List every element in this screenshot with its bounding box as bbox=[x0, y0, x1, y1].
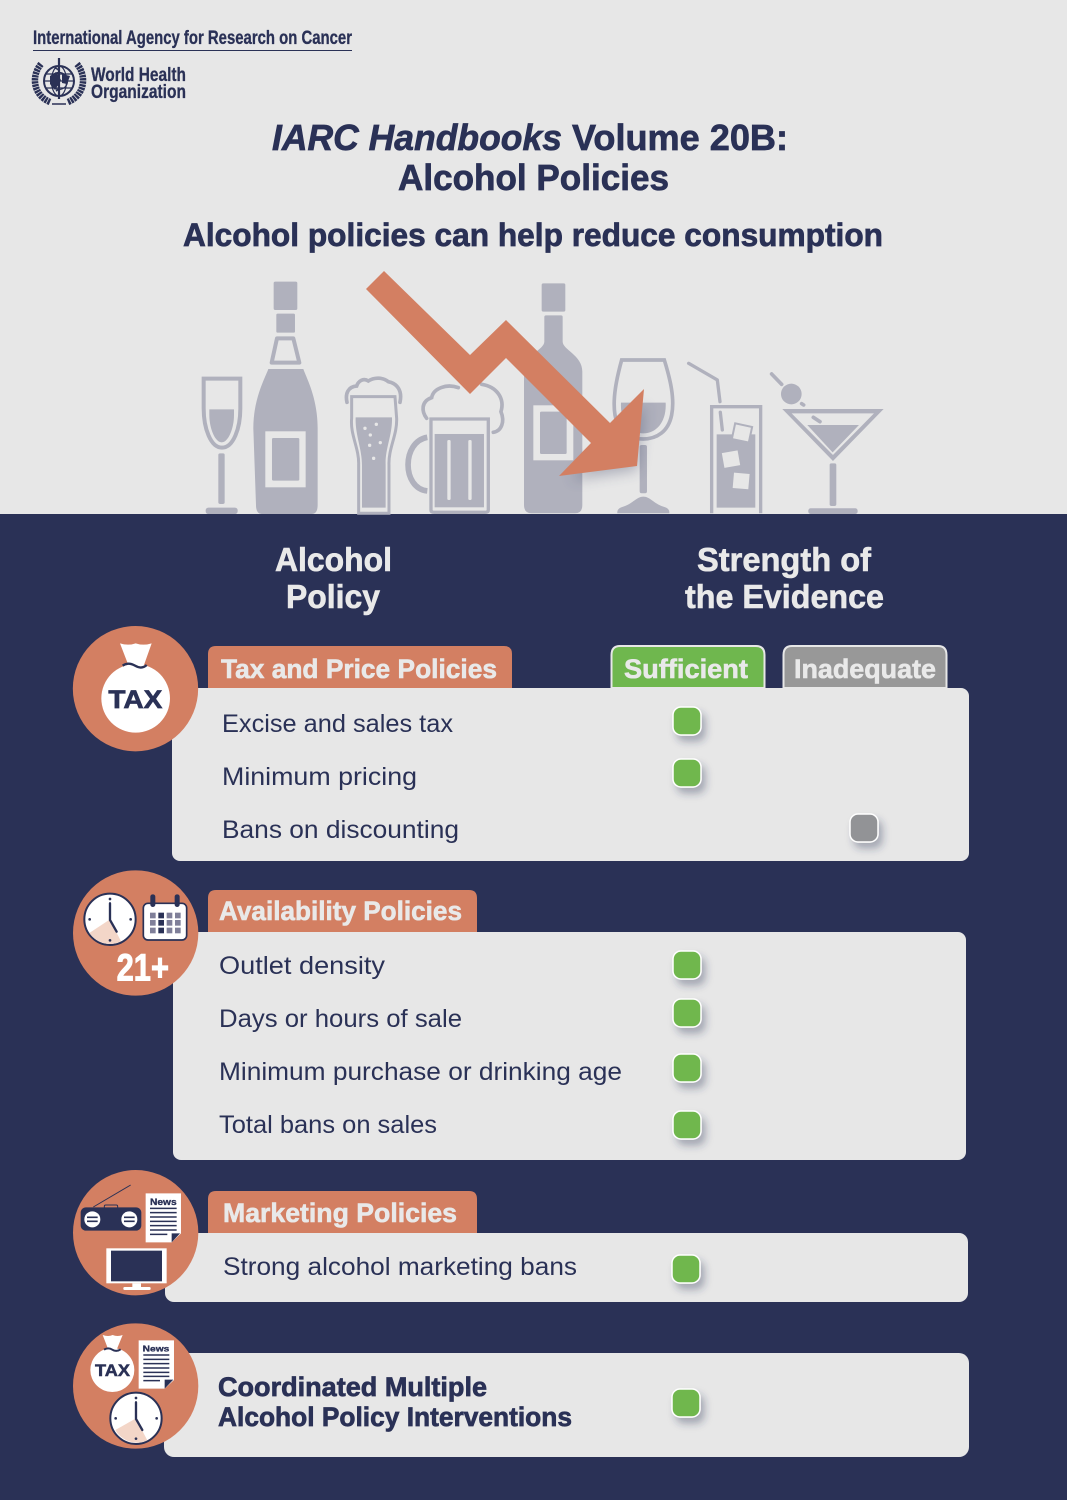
table body bbox=[165, 1233, 968, 1302]
icon: tax, newspaper and clock bbox=[73, 1323, 198, 1449]
icon: beer mug bbox=[408, 384, 503, 512]
marker: sufficient bbox=[673, 759, 701, 787]
WHO logo bbox=[35, 58, 186, 104]
row: coordinated multiple alcohol policy interventions bbox=[218, 1372, 572, 1432]
marker: inadequate bbox=[850, 814, 878, 842]
title: Volume 20B: bbox=[572, 117, 788, 158]
WHO name: World Health bbox=[91, 65, 186, 86]
marker: sufficient bbox=[673, 1054, 701, 1082]
tab: marketing policies bbox=[208, 1191, 477, 1233]
heading: Alcohol Policy: Alcohol bbox=[275, 541, 392, 578]
panel: coordinated multiple interventions bbox=[164, 1353, 969, 1457]
icon: wine bottle bbox=[524, 283, 582, 513]
title bbox=[272, 117, 788, 198]
row: minimum pricing: Minimum pricing bbox=[222, 763, 417, 791]
icon: radio, newspaper and TV: News bbox=[150, 1197, 177, 1207]
icon: tax bag: TAX bbox=[108, 686, 162, 714]
marker: sufficient bbox=[672, 1255, 700, 1283]
heading: Alcohol Policy bbox=[275, 541, 392, 615]
background: light header bbox=[0, 0, 1067, 514]
drinks illustration bbox=[204, 282, 884, 514]
icon: tax, newspaper and clock: TAX bbox=[95, 1361, 130, 1380]
panel: tax and price policies bbox=[172, 646, 969, 861]
marker: sufficient bbox=[673, 707, 701, 735]
icon: WHO emblem bbox=[35, 58, 83, 104]
icon: beer glass bbox=[346, 378, 401, 513]
tab: tax and price policies bbox=[208, 646, 512, 688]
tab: sufficient bbox=[612, 646, 764, 688]
tab: marketing policies: Marketing Policies bbox=[223, 1198, 457, 1228]
tab: tax and price policies: Tax and Price Policies bbox=[221, 654, 497, 684]
subtitle: Alcohol policies can help reduce consumption bbox=[183, 217, 883, 253]
icon: tall glass with ice bbox=[689, 363, 761, 513]
row: total bans on sales: Total bans on sales bbox=[219, 1111, 437, 1139]
icon: radio, newspaper and TV bbox=[73, 1170, 198, 1295]
heading: Alcohol Policy: Policy bbox=[286, 578, 381, 615]
icon: wine glass bbox=[614, 360, 673, 513]
title: IARC Handbooks bbox=[272, 117, 562, 158]
row: days or hours of sale: Days or hours of sale bbox=[219, 1005, 462, 1033]
row: bans on discounting: Bans on discounting bbox=[222, 816, 459, 844]
marker: sufficient bbox=[673, 1111, 701, 1139]
marker: sufficient bbox=[673, 951, 701, 979]
row: coordinated multiple alcohol policy interventions: Coordinated Multiple bbox=[218, 1372, 487, 1402]
marker: sufficient bbox=[672, 1389, 700, 1417]
tab: availability policies: Availability Policies bbox=[219, 896, 462, 926]
table body bbox=[164, 1353, 969, 1457]
icon: champagne flute bbox=[204, 379, 240, 514]
heading: Strength of the Evidence bbox=[685, 541, 884, 615]
tab: inadequate: Inadequate bbox=[794, 654, 936, 684]
row: outlet density: Outlet density bbox=[219, 952, 386, 980]
icon: martini glass bbox=[772, 374, 884, 514]
row: minimum purchase or drinking age: Minimum purchase or drinking age bbox=[219, 1058, 622, 1086]
tab: inadequate bbox=[784, 646, 946, 688]
heading: Strength of the Evidence: the Evidence bbox=[685, 578, 884, 615]
table body bbox=[172, 688, 969, 861]
icon: tax bag bbox=[73, 626, 198, 751]
background: navy panel bbox=[0, 514, 1067, 1500]
icon: clock, calendar and 21+: 21+ bbox=[117, 948, 169, 990]
arrow: downward trend bbox=[366, 271, 645, 480]
row: excise and sales tax: Excise and sales tax bbox=[222, 710, 453, 738]
icon: tax, newspaper and clock: News bbox=[143, 1343, 170, 1353]
row: strong alcohol marketing bans: Strong alcohol marketing bans bbox=[223, 1253, 577, 1281]
panel: marketing policies bbox=[165, 1191, 968, 1302]
heading: Strength of the Evidence: Strength of bbox=[697, 541, 872, 578]
row: coordinated multiple alcohol policy interventions: Alcohol Policy Interventions bbox=[218, 1402, 572, 1432]
table body bbox=[173, 932, 966, 1160]
icon: clock, calendar and 21+ bbox=[73, 870, 198, 996]
marker: sufficient bbox=[673, 999, 701, 1027]
WHO logo: Organization bbox=[91, 82, 186, 103]
IARC heading: International Agency for Research on Cancer bbox=[33, 27, 352, 49]
tab: availability policies bbox=[208, 890, 477, 932]
title: Alcohol Policies bbox=[398, 157, 669, 198]
panel: availability policies bbox=[173, 890, 966, 1160]
tab: sufficient: Sufficient bbox=[624, 654, 748, 684]
icon: champagne bottle bbox=[253, 282, 318, 514]
